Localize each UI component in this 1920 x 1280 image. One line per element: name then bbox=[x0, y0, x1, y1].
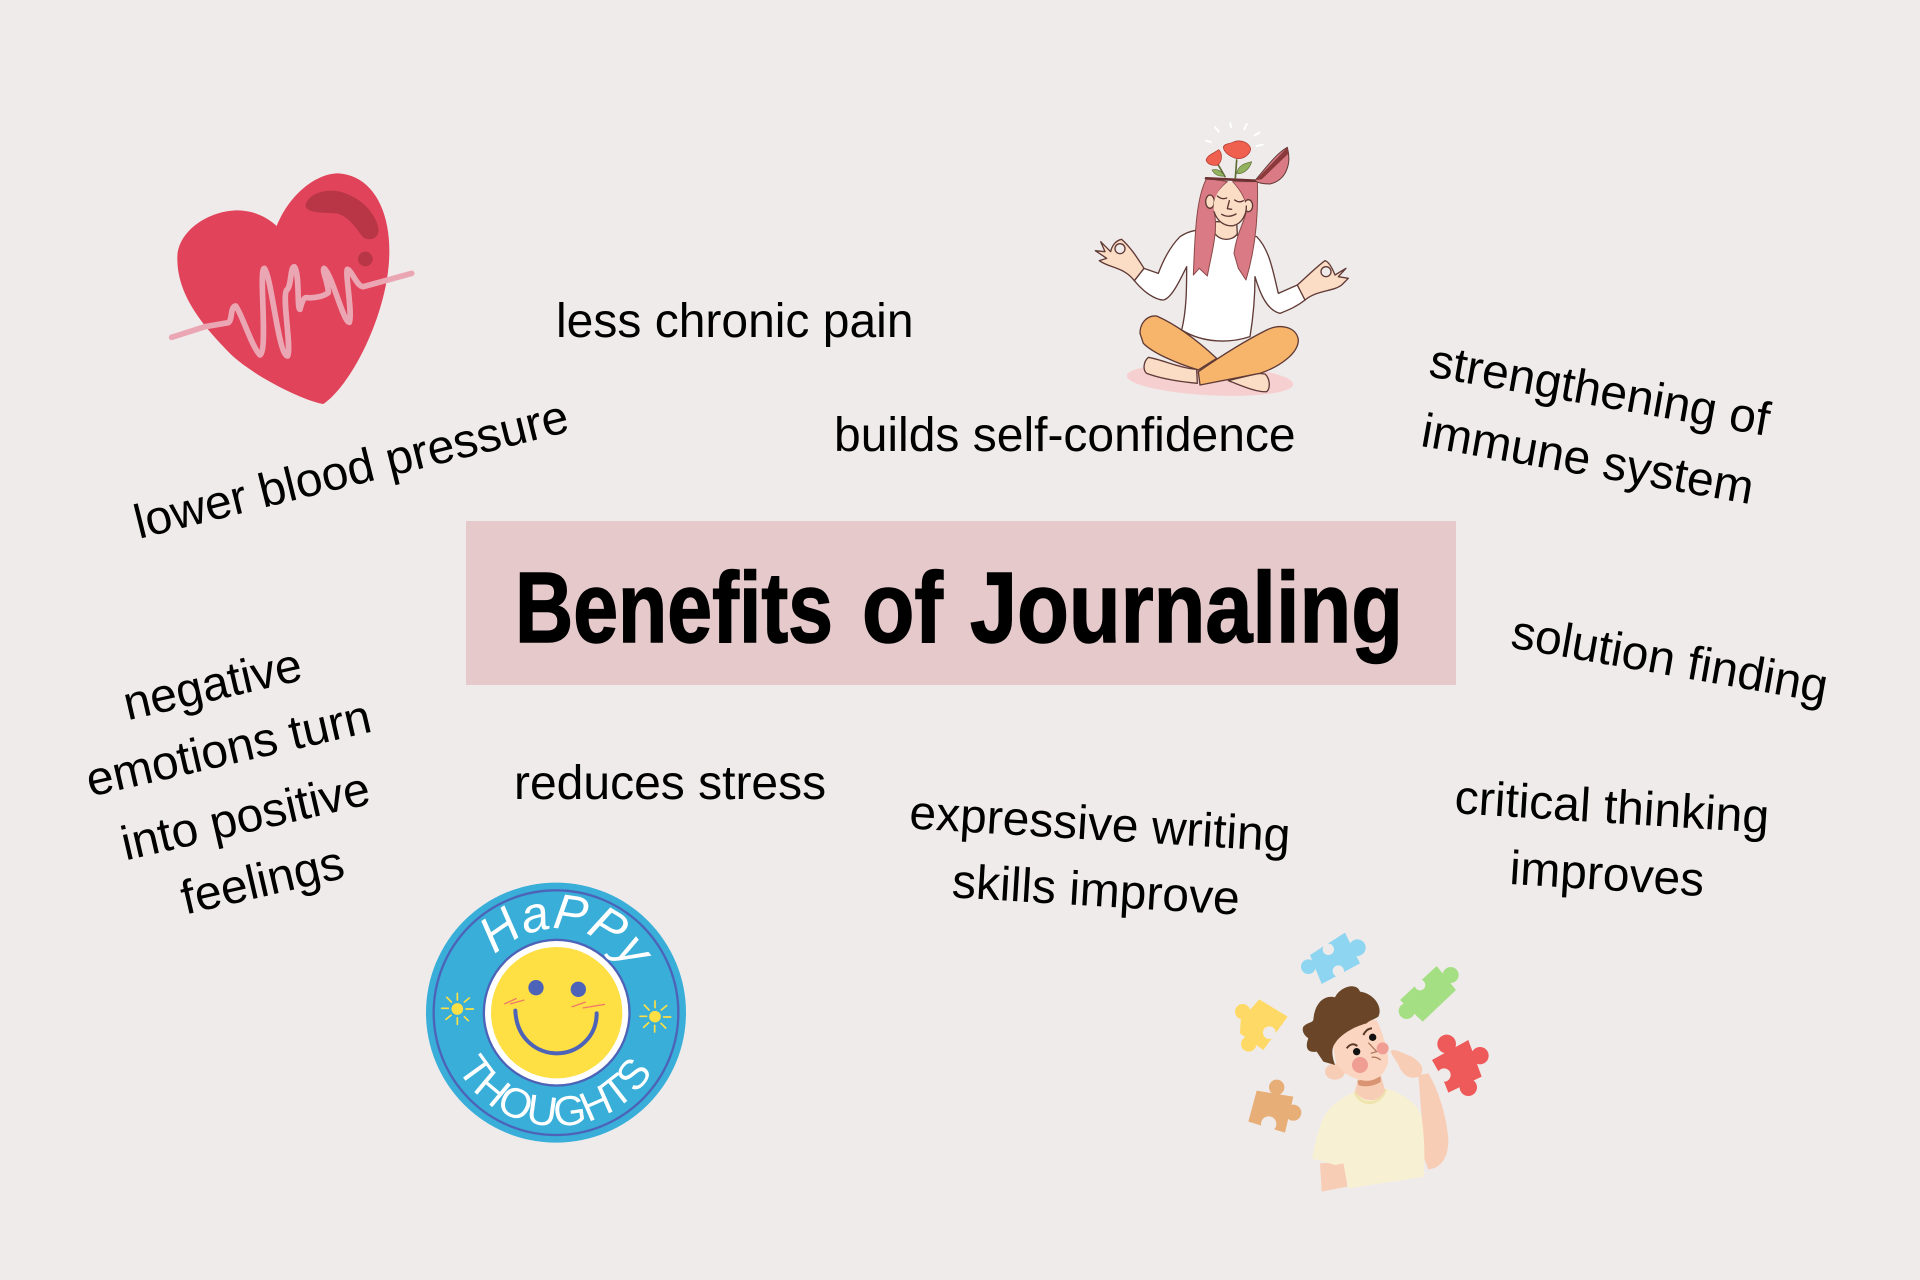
text: negative emotions turn into positive feelings: feelings bbox=[176, 836, 349, 925]
smiley face bbox=[504, 980, 605, 1053]
text: negative emotions turn into positive feelings bbox=[81, 639, 376, 925]
badge text: Happy: HaPPy bbox=[481, 894, 652, 961]
text: strengthening of immune system: strengthening of bbox=[1426, 335, 1774, 447]
back leg bbox=[1140, 316, 1217, 370]
head opening and flap bbox=[1206, 178, 1255, 181]
icon: thinking boy with puzzle pieces bbox=[1235, 933, 1489, 1192]
text: negative emotions turn into positive feelings: negative bbox=[118, 639, 307, 731]
neck bbox=[1215, 222, 1237, 239]
shirt bbox=[1134, 230, 1305, 341]
text: negative emotions turn into positive feelings: into positive bbox=[116, 763, 375, 871]
shirt bbox=[1312, 1088, 1424, 1188]
text: expressive writing skills improve bbox=[908, 786, 1292, 926]
boy arm bbox=[1418, 1073, 1448, 1169]
title: of bbox=[862, 552, 944, 664]
flowers bbox=[1218, 160, 1237, 178]
text: critical thinking improves bbox=[1453, 771, 1771, 907]
text: less chronic pain: less chronic pain bbox=[556, 295, 914, 348]
suns bbox=[442, 993, 671, 1032]
face bbox=[1325, 1064, 1345, 1080]
text: builds self-confidence: builds self-confidence bbox=[834, 409, 1296, 462]
text: negative emotions turn into positive feelings: emotions turn bbox=[81, 690, 376, 807]
text: reduces stress: reduces stress bbox=[514, 757, 826, 810]
hand bbox=[1391, 1050, 1422, 1078]
title: Benefits bbox=[515, 552, 833, 664]
text: expressive writing skills improve: skills improve bbox=[951, 855, 1241, 926]
text: lower blood pressure: lower blood pressure bbox=[129, 390, 574, 550]
title: Journaling bbox=[970, 552, 1403, 664]
ears and face bbox=[1206, 195, 1214, 208]
text: critical thinking improves: critical thinking bbox=[1453, 771, 1771, 844]
icon: meditating woman with flowers bbox=[1095, 123, 1348, 400]
puzzle piece: tan bbox=[1248, 1080, 1301, 1133]
title banner bbox=[466, 521, 1456, 685]
hands bbox=[1095, 239, 1144, 281]
text: critical thinking improves: improves bbox=[1508, 842, 1706, 907]
icon: heart with pulse line bbox=[172, 173, 412, 404]
puzzle piece: blue bbox=[1301, 933, 1366, 984]
badge text: Thoughts: THOUGHTS bbox=[463, 1052, 649, 1126]
icon: happy thoughts badge bbox=[426, 882, 686, 1143]
text: solution finding: solution finding bbox=[1507, 606, 1832, 714]
hair bbox=[1303, 986, 1380, 1065]
text: expressive writing skills improve: expressive writing bbox=[908, 786, 1292, 863]
puzzle piece: red bbox=[1432, 1035, 1489, 1096]
puzzle piece: green bbox=[1399, 966, 1459, 1022]
hair bbox=[1193, 178, 1227, 276]
neck bbox=[1355, 1075, 1385, 1100]
text: strengthening of immune system bbox=[1418, 335, 1774, 515]
front leg bbox=[1198, 327, 1298, 385]
feet bbox=[1144, 357, 1197, 383]
sparkles bbox=[1206, 123, 1263, 146]
puzzle piece: yellow bbox=[1235, 999, 1288, 1052]
text: strengthening of immune system: immune system bbox=[1418, 404, 1758, 515]
